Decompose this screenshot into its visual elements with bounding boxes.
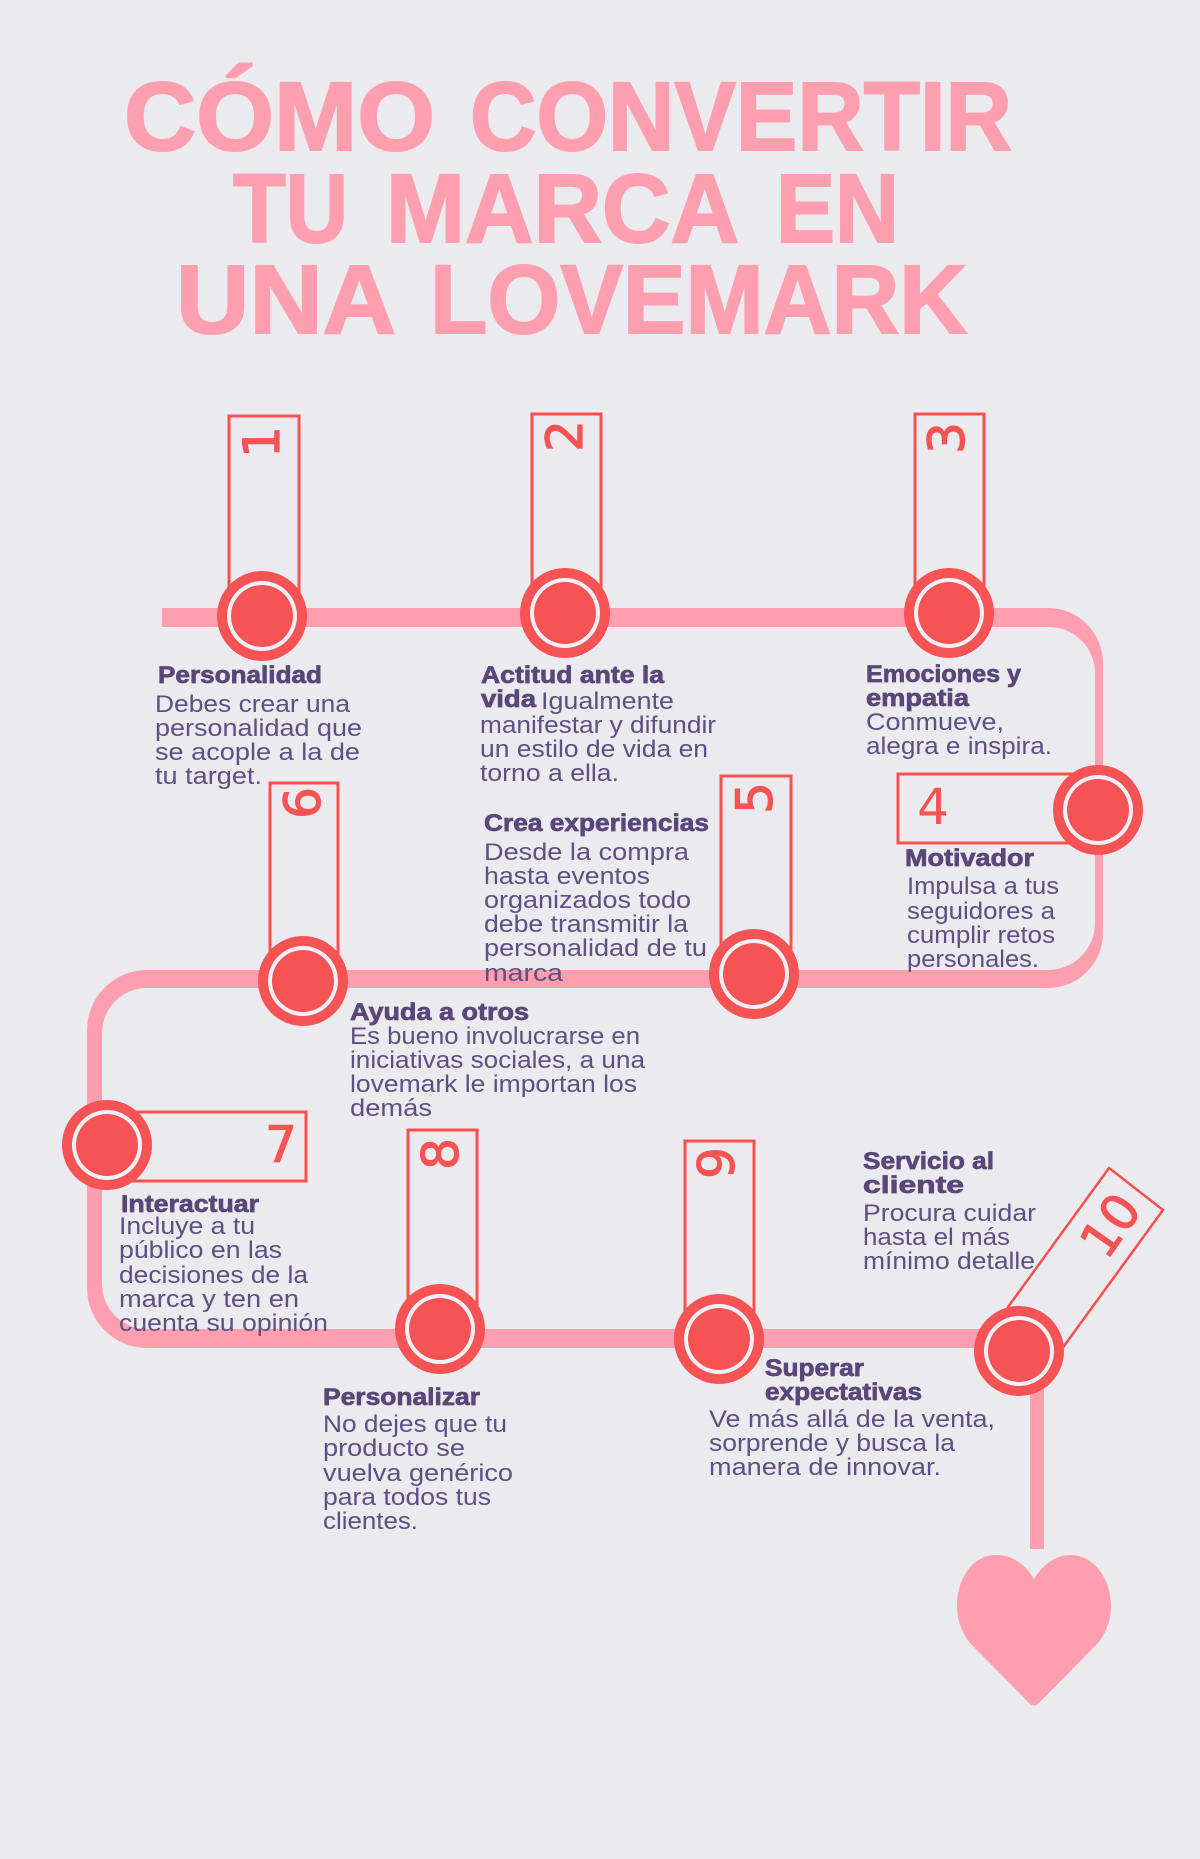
text: Personalidad bbox=[155, 662, 362, 790]
text: Servicio al cliente: hasta el más bbox=[863, 1224, 1010, 1251]
text: Interactuar: decisiones de la bbox=[119, 1262, 309, 1289]
text: Crea experiencias: organizados todo bbox=[484, 887, 691, 914]
text: Actitud ante la vida: un estilo de vida en bbox=[480, 736, 708, 763]
text: Personalizar: producto se bbox=[323, 1435, 465, 1462]
step 6 marker: 6 bbox=[274, 787, 332, 819]
icon: heart bbox=[957, 1555, 1111, 1706]
text: Personalidad: se acople a la de bbox=[155, 739, 360, 766]
text: Ayuda a otros: Es bueno involucrarse en bbox=[350, 1023, 640, 1050]
text: Motivador: cumplir retos bbox=[907, 922, 1055, 949]
text: Superar expectativas: expectativas bbox=[765, 1379, 922, 1406]
text: Personalizar bbox=[323, 1384, 513, 1535]
text: Crea experiencias bbox=[484, 810, 709, 987]
text: Crea experiencias: debe transmitir la bbox=[484, 911, 689, 938]
text: Personalidad: Debes crear una bbox=[155, 691, 351, 718]
text: Ayuda a otros bbox=[350, 999, 646, 1122]
text: Servicio al cliente: mínimo detalle bbox=[863, 1248, 1035, 1275]
stem to heart bbox=[1030, 1370, 1044, 1549]
title: UNA bbox=[176, 245, 396, 354]
text: Servicio al cliente: Servicio al bbox=[863, 1148, 994, 1175]
text: Ayuda a otros: demás bbox=[350, 1095, 432, 1122]
winding pink track bbox=[87, 608, 1103, 1348]
step 4 marker: 4 bbox=[917, 778, 949, 836]
text: Interactuar: marca y ten en bbox=[119, 1286, 299, 1313]
text: Personalizar: No dejes que tu bbox=[323, 1411, 507, 1438]
text: Interactuar: Interactuar bbox=[121, 1191, 259, 1218]
step 7 marker bbox=[62, 1100, 306, 1190]
step 9 marker bbox=[674, 1141, 764, 1384]
text: Actitud ante la vida bbox=[480, 662, 716, 787]
text: Ayuda a otros: Ayuda a otros bbox=[350, 999, 529, 1026]
text: Personalizar: vuelva genérico bbox=[323, 1460, 513, 1487]
text: Servicio al cliente: Procura cuidar bbox=[863, 1200, 1036, 1227]
text: Ayuda a otros: lovemark le importan los bbox=[350, 1071, 637, 1098]
step 3 marker bbox=[904, 414, 994, 658]
text: Superar expectativas: Superar bbox=[765, 1355, 864, 1382]
title bbox=[124, 62, 1012, 354]
text: Emociones y empatia: empatia bbox=[866, 685, 970, 712]
text: Crea experiencias: hasta eventos bbox=[484, 863, 650, 890]
text: Ayuda a otros: iniciativas sociales, a una bbox=[350, 1047, 646, 1074]
text: Actitud ante la vida: Igualmente bbox=[541, 688, 674, 715]
text: Personalizar: para todos tus bbox=[323, 1484, 491, 1511]
text: Crea experiencias: marca bbox=[484, 960, 564, 987]
step 7 marker: 7 bbox=[265, 1116, 297, 1174]
text: Actitud ante la vida: torno a ella. bbox=[480, 760, 619, 787]
text: Emociones y empatia: alegra e inspira. bbox=[866, 733, 1052, 760]
text: Emociones y empatia: Emociones y bbox=[866, 661, 1022, 688]
text: Motivador: Impulsa a tus bbox=[907, 873, 1059, 900]
title: LOVEMARK bbox=[430, 245, 967, 354]
text: Servicio al cliente: cliente bbox=[863, 1172, 964, 1199]
text: Superar expectativas: sorprende y busca la bbox=[709, 1430, 956, 1457]
text: Interactuar: público en las bbox=[119, 1237, 282, 1264]
text: Actitud ante la vida: Actitud ante la bbox=[481, 662, 665, 689]
text: Crea experiencias: Crea experiencias bbox=[484, 810, 709, 837]
text: Personalidad: personalidad que bbox=[155, 715, 362, 742]
text: Superar expectativas: Ve más allá de la venta, bbox=[709, 1406, 995, 1433]
text: Personalidad: Personalidad bbox=[158, 662, 322, 689]
text: Emociones y empatia bbox=[866, 661, 1052, 760]
text: Crea experiencias: Desde la compra bbox=[484, 839, 690, 866]
text: Crea experiencias: personalidad de tu bbox=[484, 935, 707, 962]
text: Interactuar: cuenta su opinión bbox=[119, 1310, 328, 1337]
step 10 marker bbox=[974, 1168, 1163, 1396]
step 3 marker: 3 bbox=[918, 422, 976, 454]
step 8 marker bbox=[395, 1130, 485, 1374]
step 5 marker bbox=[709, 776, 799, 1019]
text: Interactuar: Incluye a tu bbox=[119, 1213, 255, 1240]
text: Personalizar: Personalizar bbox=[323, 1384, 480, 1411]
text: Actitud ante la vida: manifestar y difundir bbox=[480, 712, 716, 739]
title: CÓMO bbox=[124, 62, 435, 171]
text: Motivador: Motivador bbox=[905, 845, 1034, 872]
step 1 marker bbox=[217, 416, 307, 661]
step 1 marker: 1 bbox=[233, 426, 291, 458]
text: Motivador: seguidores a bbox=[907, 898, 1056, 925]
title: MARCA bbox=[386, 154, 739, 263]
text: Interactuar bbox=[119, 1191, 328, 1337]
text: Personalidad: tu target. bbox=[155, 763, 262, 790]
text: Servicio al cliente bbox=[863, 1148, 1036, 1275]
step 6 marker bbox=[258, 783, 348, 1026]
text: Actitud ante la vida: vida bbox=[481, 686, 537, 713]
step 4 marker bbox=[898, 765, 1143, 855]
step 5 marker: 5 bbox=[726, 782, 784, 814]
step 2 marker bbox=[520, 414, 610, 658]
text: Superar expectativas: manera de innovar. bbox=[709, 1454, 941, 1481]
text: Superar expectativas bbox=[709, 1355, 995, 1481]
title: EN bbox=[776, 154, 899, 263]
step 2 marker: 2 bbox=[536, 420, 594, 452]
title: TU bbox=[233, 154, 348, 263]
text: Personalizar: clientes. bbox=[323, 1508, 418, 1535]
step 8 marker: 8 bbox=[412, 1138, 470, 1170]
step 9 marker: 9 bbox=[688, 1147, 746, 1179]
text: Motivador bbox=[905, 845, 1059, 973]
step 10 marker: 10 bbox=[1069, 1183, 1153, 1268]
text: Motivador: personales. bbox=[907, 946, 1039, 973]
text: Emociones y empatia: Conmueve, bbox=[866, 709, 1004, 736]
title: CONVERTIR bbox=[470, 62, 1012, 171]
